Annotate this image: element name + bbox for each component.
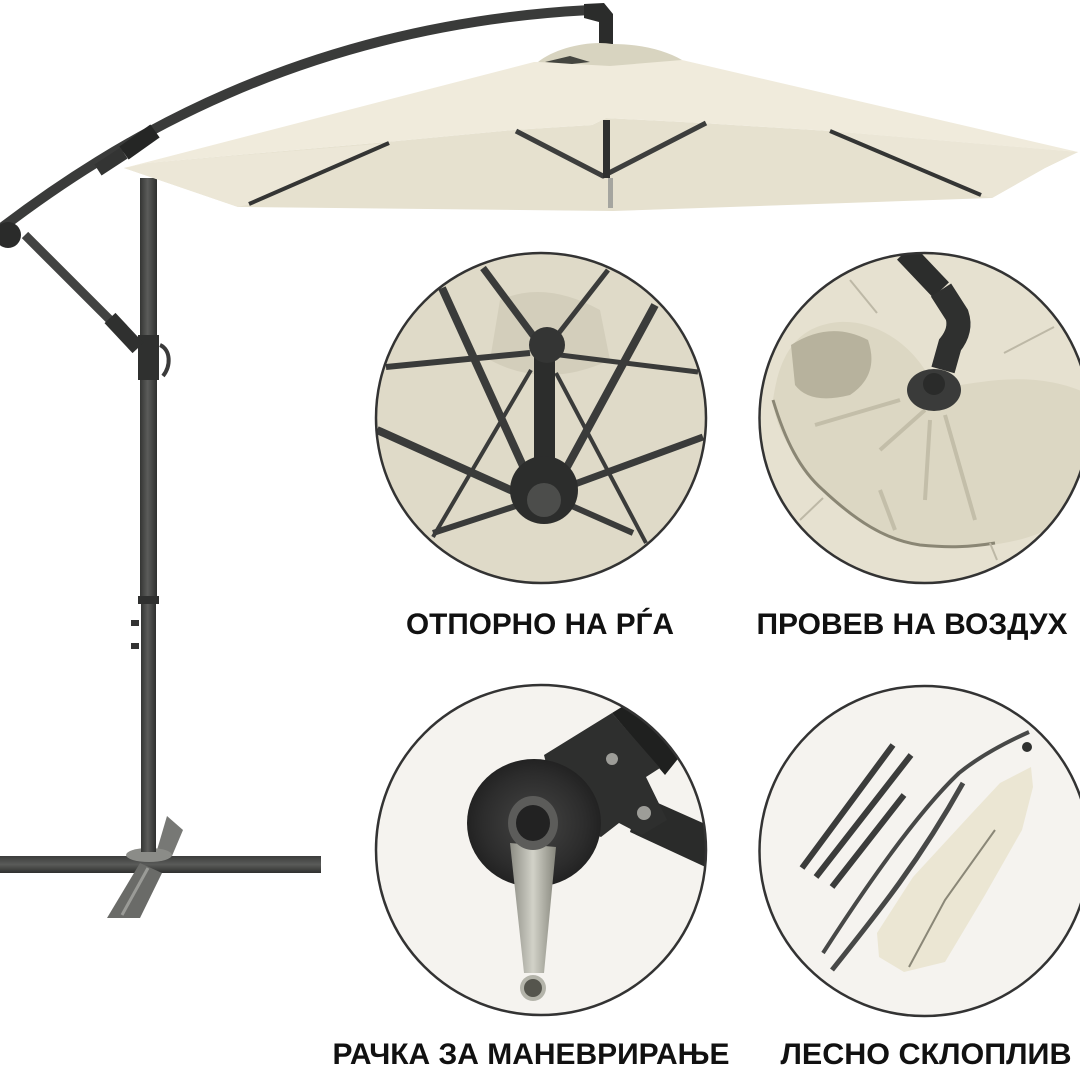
circle outline [760, 253, 1080, 583]
umbrella canopy [124, 43, 1078, 211]
photo: canopy frame [370, 250, 710, 590]
feature: easy folding [755, 680, 1080, 1071]
umbrella base [0, 816, 321, 918]
label: ОТПОРНО НА РЃА [406, 607, 674, 641]
feature: rust resistant [370, 250, 710, 641]
feature: crank handle [332, 680, 730, 1071]
photo: handle [370, 680, 712, 1020]
umbrella pole [131, 178, 169, 852]
label: РАЧКА ЗА МАНЕВРИРАЊЕ [332, 1038, 730, 1071]
circle outline [376, 685, 706, 1015]
label: ЛЕСНО СКЛОПЛИВ [780, 1038, 1072, 1071]
circle outline [376, 253, 706, 583]
feature: air vent [755, 250, 1080, 641]
photo: base weight [755, 250, 1080, 590]
circle outline [760, 686, 1080, 1016]
umbrella arm [0, 3, 613, 348]
photo: folded parts [755, 680, 1080, 1020]
label: ПРОВЕВ НА ВОЗДУХ [756, 608, 1068, 641]
